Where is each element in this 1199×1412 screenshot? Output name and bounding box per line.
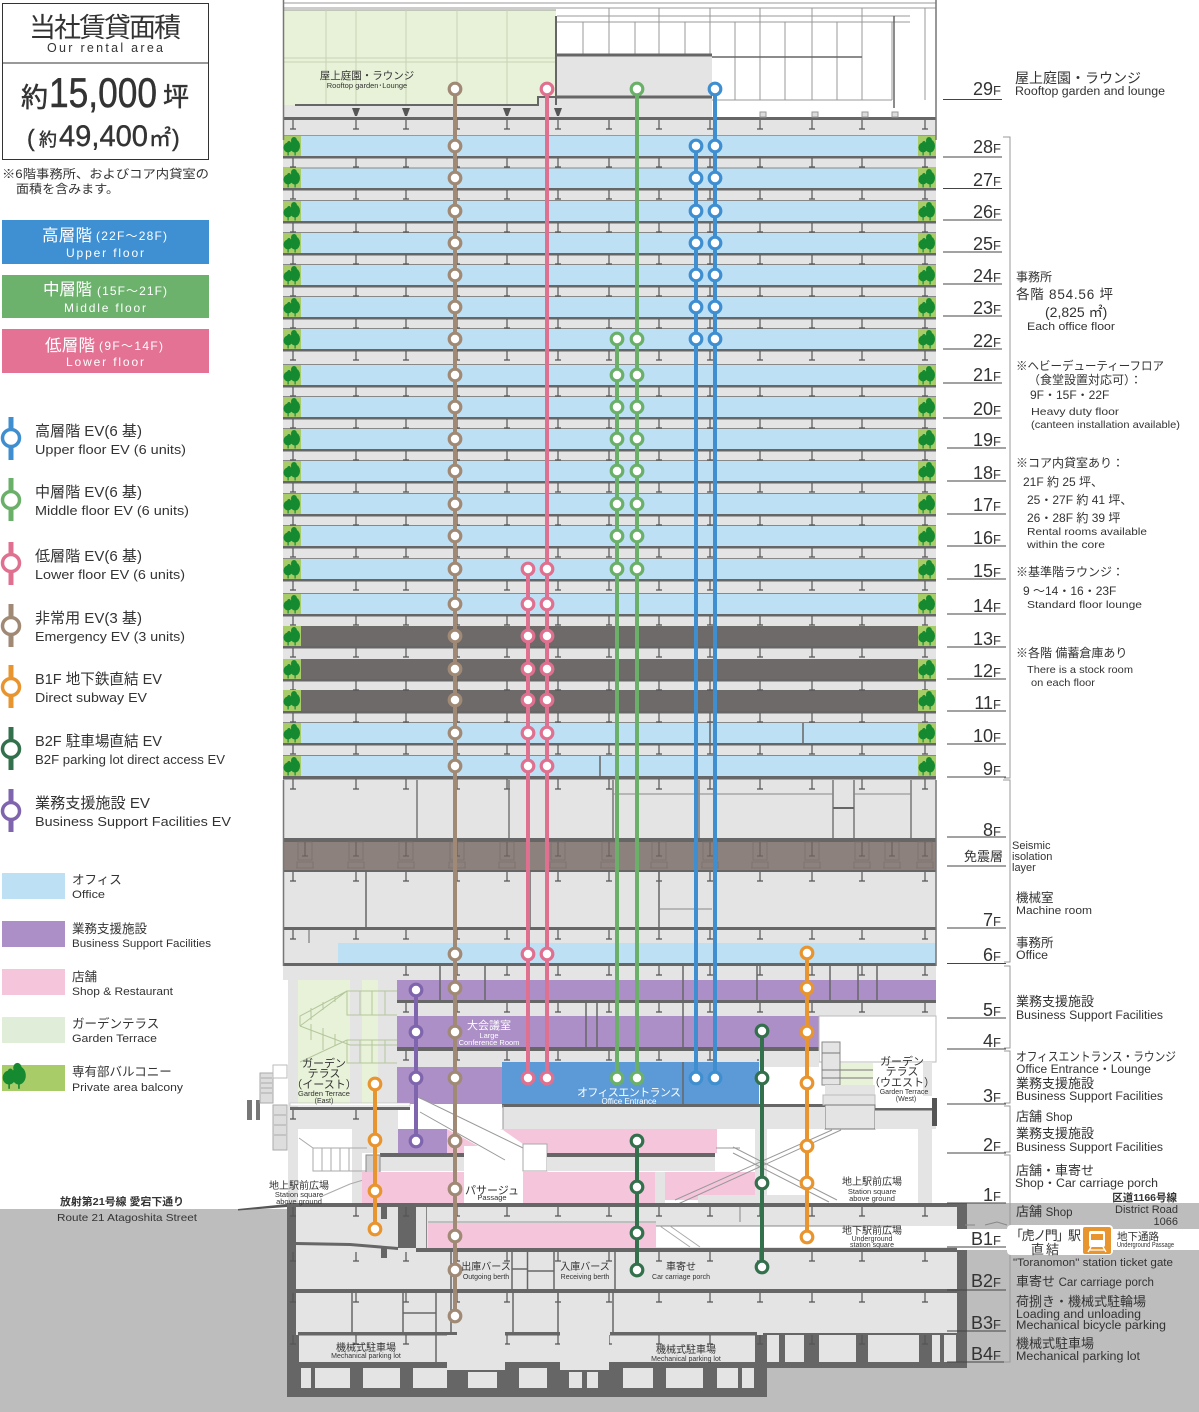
legend business support EV [2, 789, 231, 832]
label station square left: Station square [275, 1190, 323, 1199]
label underground square: 地下駅前広場 [842, 1224, 902, 1237]
middle floor button: Middle floor [64, 301, 146, 315]
legend business support [2, 921, 212, 950]
legend middle EV: Middle floor EV (6 units) [35, 503, 189, 518]
note office floor area [1016, 270, 1115, 333]
icon: train [1083, 1227, 1111, 1254]
middle floor button [2, 275, 209, 318]
legend middle EV [2, 478, 189, 521]
label west terrace: （ウエスト） [869, 1076, 935, 1089]
floor zone legend [2, 220, 209, 373]
heading: 当社賃貸面積 [29, 13, 181, 43]
floor numbers: 22F [973, 331, 1001, 351]
floor numbers: 2F [983, 1135, 1001, 1155]
floor numbers: 5F [983, 1000, 1001, 1020]
elevator: business support purple [410, 984, 422, 1147]
upper floor button [2, 220, 209, 264]
label receiving berth: 入庫バース [560, 1260, 610, 1273]
floor numbers: 13F [973, 629, 1001, 649]
label car porch [652, 1260, 710, 1281]
note rooftop: Rooftop garden and lounge [1015, 86, 1165, 98]
legend office: オフィス [72, 873, 122, 887]
floor numbers: 1F [983, 1185, 1001, 1205]
note B3: Loading and unloading [1016, 1309, 1141, 1321]
building section [238, 0, 1199, 1397]
note machine room: 機械室 [1016, 890, 1054, 905]
legend lower EV: 低層階 EV(6 基) [35, 548, 142, 565]
floor numbers: 25F [973, 234, 1001, 254]
label passage: パサージュ [465, 1184, 519, 1197]
label parking right: 機械式駐車場 [656, 1343, 716, 1356]
area square meters: ㎡ [149, 126, 171, 151]
label station square left: above ground [276, 1197, 322, 1206]
floor numbers: 免震層 [964, 849, 1003, 864]
floor numbers [964, 79, 1003, 1364]
legend balcony: Private area balcony [72, 1082, 184, 1094]
note heavy duty: （食堂設置対応可）： [1028, 373, 1142, 387]
station callout: 「虎ノ門」駅 [1010, 1228, 1081, 1243]
middle floor button: (15F～21F) [97, 284, 167, 298]
lower floor button: 低層階 [45, 336, 95, 355]
label underground square: station square [850, 1242, 894, 1249]
legend shop [2, 969, 173, 998]
note standard lounge: 9 ～14・16・23F [1023, 584, 1116, 598]
note B3 [1016, 1294, 1166, 1332]
label east terrace: (East) [315, 1098, 333, 1105]
legend business support: Business Support Facilities [72, 938, 212, 950]
label office entrance: Office Entrance [602, 1097, 657, 1106]
label road [57, 1195, 197, 1224]
legend business support: 業務支援施設 [72, 921, 148, 936]
legend upper EV [2, 417, 186, 460]
floor numbers: 16F [973, 528, 1001, 548]
station callout [1007, 1225, 1113, 1257]
legend lower EV [2, 542, 185, 585]
stock floors 13F to 11F [283, 626, 936, 711]
label passage [465, 1184, 519, 1202]
rooftop level [283, 3, 936, 120]
floor numbers: 12F [973, 661, 1001, 681]
floor numbers: B3F [971, 1313, 1001, 1333]
elevator: emergency brown [449, 83, 461, 1322]
label car porch: Car carriage porch [652, 1274, 710, 1281]
note district road: 区道1166号線 [1112, 1191, 1177, 1204]
floor numbers: 21F [973, 365, 1001, 385]
note 3F [1016, 1050, 1176, 1103]
partitions 10F 9F [600, 723, 803, 776]
legend emergency EV [2, 604, 185, 647]
note stock room: on each floor [1031, 677, 1096, 689]
note B1 shop: 店舗 Shop [1016, 1204, 1072, 1219]
note stock room: There is a stock room [1027, 664, 1133, 676]
note seismic: layer [1012, 862, 1036, 874]
rental area note: 面積を含みます。 [16, 181, 119, 196]
floor numbers: B1F [971, 1229, 1001, 1249]
note B2: 車寄せ Car carriage porch [1016, 1274, 1154, 1289]
underground passage: 地下通路 [1117, 1230, 1159, 1243]
floor numbers: 10F [973, 726, 1001, 746]
note 3F: Office Entrance・Lounge [1016, 1064, 1151, 1076]
legend parking EV [2, 727, 225, 770]
floor numbers: 17F [973, 495, 1001, 515]
label parking right: Mechanical parking lot [651, 1356, 721, 1363]
label parking left [331, 1341, 401, 1360]
legend upper EV: Upper floor EV (6 units) [35, 442, 186, 457]
note 3F: Business Support Facilities [1016, 1091, 1163, 1103]
note stock room: ※各階 備蓄倉庫あり [1016, 645, 1127, 660]
label receiving berth [560, 1260, 610, 1281]
floor slabs [283, 135, 936, 780]
note core rental rooms [1016, 455, 1147, 551]
note core rental rooms: Rental rooms available [1027, 526, 1147, 538]
note 5F [1016, 994, 1163, 1022]
floor numbers: 3F [983, 1086, 1001, 1106]
shops floors 2F and 1F [362, 1098, 932, 1204]
label parking left: 機械式駐車場 [336, 1341, 396, 1354]
note district road [1112, 1191, 1178, 1228]
floor numbers: 20F [973, 399, 1001, 419]
floor numbers: 28F [973, 137, 1001, 157]
legend office: Office [72, 889, 105, 901]
floor numbers: 23F [973, 298, 1001, 318]
label east terrace: Garden Terrace [298, 1089, 350, 1098]
label east terrace: ガーデン [302, 1056, 346, 1070]
note machine room [1016, 890, 1092, 917]
note 1F [1015, 1163, 1158, 1190]
note 2F: 業務支援施設 [1016, 1126, 1094, 1141]
note office floor area: 各階 854.56 坪 [1016, 287, 1113, 302]
legend shop: 店舗 [72, 970, 97, 984]
note seismic: isolation [1012, 851, 1052, 863]
note heavy duty: 9F・15F・22F [1030, 388, 1109, 402]
note stock room [1016, 645, 1133, 689]
note heavy duty [1016, 358, 1180, 431]
note 1F: 店舗・車寄せ [1016, 1163, 1094, 1178]
legend garden terrace [2, 1016, 159, 1045]
heading: Our rental area [47, 41, 163, 55]
note 5F: 業務支援施設 [1016, 994, 1094, 1009]
note 6F office [1016, 936, 1054, 962]
elevator: subway orange [369, 947, 813, 1243]
label west terrace: ガーデン [880, 1054, 924, 1068]
middle floor button: 中層階 [43, 280, 92, 299]
note heavy duty: (canteen installation available) [1031, 419, 1180, 431]
label conference room: Conference Room [459, 1038, 519, 1047]
tower core background [283, 120, 936, 780]
label road: Route 21 Atagoshita Street [57, 1212, 197, 1224]
note core rental rooms: 26・28F 約 39 坪 [1027, 510, 1120, 525]
note seismic [1012, 840, 1052, 874]
label parking left: Mechanical parking lot [331, 1353, 401, 1360]
note B4 [1016, 1336, 1141, 1363]
note core rental rooms: 25・27F 約 41 坪、 [1027, 492, 1132, 507]
note core rental rooms: within the core [1026, 539, 1105, 551]
floor numbers: 27F [973, 170, 1001, 190]
floor 4F business support [397, 1003, 936, 1062]
upper floor button: Upper floor [66, 246, 144, 260]
note standard lounge [1016, 564, 1142, 611]
note B3: Mechanical bicycle parking [1016, 1320, 1166, 1332]
label outgoing berth [461, 1260, 511, 1281]
legend garden terrace: Garden Terrace [72, 1033, 157, 1045]
note standard lounge: Standard floor lounge [1027, 599, 1142, 611]
elevator lines [369, 83, 813, 1322]
station callout: 直結 [1031, 1242, 1061, 1257]
note rooftop: 屋上庭園・ラウンジ [1015, 70, 1141, 86]
area tsubo: 15,000 [49, 69, 157, 116]
area tsubo: 約 [21, 83, 48, 113]
floor numbers: 8F [983, 820, 1001, 840]
note core rental rooms: ※コア内貸室あり： [1016, 455, 1124, 470]
legend balcony: 専有部バルコニー [72, 1065, 172, 1079]
label east terrace [291, 1056, 357, 1105]
floor numbers: 24F [973, 266, 1001, 286]
label conference room: Large [479, 1031, 499, 1040]
floor 2F east block [290, 1103, 464, 1203]
legend garden terrace: ガーデンテラス [72, 1016, 159, 1031]
west terrace [822, 1042, 937, 1129]
east garden terrace [283, 966, 397, 1203]
label conference room: 大会議室 [467, 1018, 511, 1032]
note office floor area: 事務所 [1016, 270, 1052, 284]
floor index right [943, 70, 1180, 1364]
label west terrace: (West) [896, 1096, 916, 1103]
lower floor button: Lower floor [66, 355, 144, 369]
private balconies with trees [283, 136, 936, 776]
note 2F: Business Support Facilities [1016, 1142, 1163, 1154]
label underground square [842, 1224, 902, 1249]
note B4: 機械式駐車場 [1016, 1336, 1094, 1351]
tower outer walls [284, 0, 936, 966]
office floor 6F [283, 930, 936, 966]
upper floor button: (22F～28F) [96, 229, 167, 243]
floor numbers: 9F [983, 759, 1001, 779]
floor numbers: 29F [973, 79, 1001, 99]
floor numbers: 26F [973, 202, 1001, 222]
floor 5F business support [283, 966, 936, 1003]
floor numbers: 15F [973, 561, 1001, 581]
label west terrace [869, 1054, 935, 1103]
legend balcony [2, 1063, 184, 1094]
note office floor area: Each office floor [1027, 321, 1115, 333]
building labels [57, 69, 935, 1363]
basement structure [238, 1203, 1199, 1397]
brackets [1003, 137, 1010, 1362]
floor numbers: B2F [971, 1271, 1001, 1291]
rental area note [2, 166, 209, 196]
note 2F: 店舗 Shop [1016, 1109, 1072, 1124]
rental area note: ※6階事務所、およびコア内貸室の [2, 166, 209, 181]
upper floor button: 高層階 [42, 226, 92, 245]
note 6F office: 事務所 [1016, 936, 1054, 950]
legend middle EV: 中層階 EV(6 基) [35, 484, 142, 501]
floor numbers: B4F [971, 1344, 1001, 1364]
area square meters: ( [27, 125, 35, 151]
legend subway EV: Direct subway EV [35, 690, 147, 705]
label underground square: Underground [852, 1236, 893, 1243]
note core rental rooms: 21F 約 25 坪、 [1023, 474, 1103, 489]
floor numbers: 19F [973, 430, 1001, 450]
floor 3F entrance [397, 1051, 825, 1108]
floor numbers: 14F [973, 596, 1001, 616]
lower floor button: (9F～14F) [99, 339, 163, 353]
legend parking EV: B2F 駐車場直結 EV [35, 733, 162, 750]
legend upper EV: 高層階 EV(6 基) [35, 423, 142, 440]
label outgoing berth: Outgoing berth [463, 1274, 509, 1281]
legend subway EV: B1F 地下鉄直結 EV [35, 671, 162, 688]
label parking right [651, 1343, 721, 1363]
floor numbers: 4F [983, 1031, 1001, 1051]
note heavy duty: ※ヘビーデューティーフロア [1016, 358, 1164, 373]
note district road: 1066 [1154, 1216, 1178, 1228]
note rooftop [1015, 70, 1165, 98]
floor numbers: 6F [983, 945, 1001, 965]
label rooftop: 屋上庭園・ラウンジ [320, 69, 414, 82]
note standard lounge: ※基準階ラウンジ： [1016, 564, 1124, 579]
legend emergency EV: Emergency EV (3 units) [35, 629, 185, 644]
elevator: upper floor blue [690, 83, 721, 1084]
area square meters: 約 [39, 130, 57, 150]
lower floor button [2, 329, 209, 373]
legend shop: Shop & Restaurant [72, 986, 173, 998]
elevator: parking dark green [631, 1025, 768, 1276]
area square meters: 49,400 [59, 120, 148, 153]
seismic isolation layer [283, 838, 936, 872]
floor hangers [290, 158, 928, 788]
floor numbers: 11F [974, 693, 1001, 713]
background ground [0, 1203, 1199, 1412]
area square meters: ) [172, 125, 180, 151]
label passage: Passage [477, 1193, 507, 1202]
note B4: Mechanical parking lot [1016, 1351, 1141, 1363]
label office entrance: オフィスエントランス [577, 1086, 681, 1099]
title panel: rental area [2, 4, 208, 160]
note district road: District Road [1115, 1204, 1178, 1216]
label station square right: above ground [849, 1194, 895, 1203]
area tsubo: 坪 [163, 82, 189, 112]
legend lower EV: Lower floor EV (6 units) [35, 567, 185, 582]
label station square right: 地上駅前広場 [842, 1175, 902, 1188]
legend parking EV: B2F parking lot direct access EV [35, 752, 225, 767]
exterior stair outline left [247, 1065, 287, 1150]
office floors 28F to 9F [283, 136, 936, 776]
legend emergency EV: 非常用 EV(3 基) [35, 610, 142, 627]
legend office [2, 873, 122, 901]
note 3F: オフィスエントランス・ラウンジ [1016, 1050, 1176, 1064]
legend business support EV: 業務支援施設 EV [35, 795, 150, 812]
label east terrace: （イースト） [291, 1078, 357, 1091]
label conference room [459, 1018, 519, 1047]
area colour legend [2, 873, 212, 1094]
machine floor 8F [283, 780, 936, 838]
floor level lines [943, 100, 1006, 1362]
label road: 放射第21号線 愛宕下通り [60, 1195, 184, 1208]
elevator legend [2, 417, 231, 832]
underground passage: Underground Passage [1117, 1242, 1174, 1249]
label receiving berth: Receiving berth [561, 1274, 609, 1281]
floor numbers: 7F [983, 910, 1001, 930]
note station gate: "Toranomon" station ticket gate [1013, 1257, 1173, 1269]
floor numbers: 18F [973, 463, 1001, 483]
label east terrace: テラス [308, 1068, 340, 1080]
elevator: lower floor pink [522, 83, 553, 1084]
label car porch: 車寄せ [666, 1260, 696, 1273]
label station square right [842, 1175, 902, 1203]
label rooftop [320, 69, 414, 90]
note office floor area: (2,825 ㎡) [1045, 304, 1107, 320]
label west terrace: Garden Terrace [880, 1089, 928, 1096]
note seismic: Seismic [1012, 840, 1051, 852]
note 6F office: Office [1016, 950, 1048, 962]
legend business support EV: Business Support Facilities EV [35, 814, 231, 829]
label outgoing berth: 出庫バース [461, 1260, 511, 1273]
label station square left: 地上駅前広場 [269, 1179, 329, 1192]
label station square right: Station square [848, 1187, 896, 1196]
label west terrace: テラス [886, 1066, 918, 1078]
label rooftop: Rooftop garden･Lounge [327, 81, 407, 90]
note 3F: 業務支援施設 [1016, 1076, 1094, 1091]
elevator: middle floor green [611, 83, 643, 1084]
note 1F: Shop・Car carriage porch [1015, 1178, 1158, 1190]
note 5F: Business Support Facilities [1016, 1010, 1163, 1022]
legend subway EV [2, 665, 162, 708]
note 2F [1016, 1109, 1163, 1154]
note machine room: Machine room [1016, 905, 1092, 917]
label station square left [269, 1179, 329, 1206]
note heavy duty: Heavy duty floor [1031, 406, 1120, 418]
note B3: 荷捌き・機械式駐輪場 [1016, 1294, 1146, 1309]
machine floor 7F [283, 872, 936, 930]
label office entrance [577, 1086, 681, 1106]
underground passage [1117, 1230, 1174, 1249]
